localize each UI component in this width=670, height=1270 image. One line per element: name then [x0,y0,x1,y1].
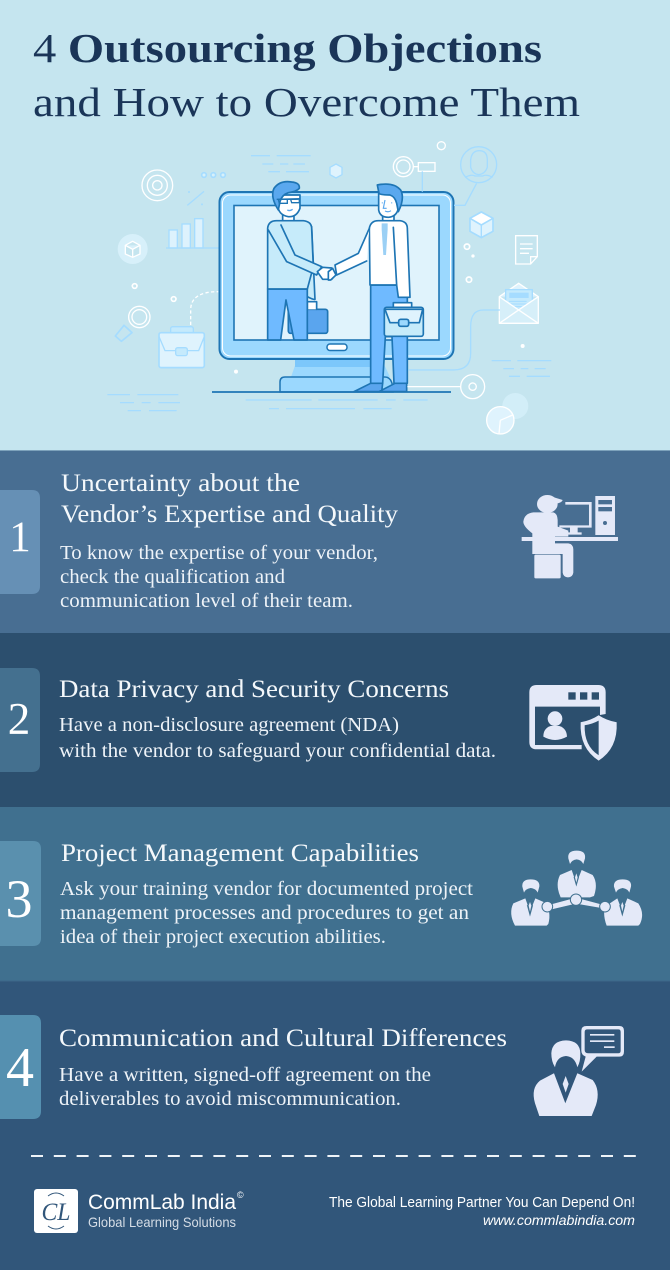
dashed divider [31,1155,636,1157]
body text 3: Ask your training vendor for documented project [60,879,474,900]
number tab 3: 3 [6,869,32,929]
tagline and website [329,1195,635,1228]
heading 4: Communication and Cultural Differences [59,1025,507,1052]
number tab 1: 1 [9,514,31,561]
number tab 3 [0,841,41,946]
panel: objection 3 [0,807,670,981]
body text 3: management processes and procedures to get an [60,903,469,924]
logo [34,1189,244,1233]
heading 3: Project Management Capabilities [61,840,419,867]
left floating icons [107,156,340,411]
heading 1 [61,470,399,528]
title: 4 Outsourcing Objections [33,25,542,71]
icon: window with user and shield [529,685,617,761]
panel: objection 4 [0,980,670,1270]
body text 4 [59,1065,431,1110]
panel: objection 1 [0,450,670,633]
body text 4: Have a written, signed-off agreement on the [59,1065,431,1086]
heading 1: Uncertainty about the [61,470,300,497]
number tab 2 [0,668,40,772]
monitor [212,192,454,392]
heading 1: Vendor’s Expertise and Quality [61,501,399,528]
number tab 2: 2 [8,694,30,744]
man with tie and briefcase [328,184,423,392]
right floating icons [330,142,551,434]
logo: CL [42,1199,70,1226]
icon: person at computer [522,495,618,578]
man with glasses [268,182,335,340]
number tab 4 [0,1015,41,1119]
body text 1: communication level of their team. [60,591,353,612]
body text 2 [59,715,496,762]
heading 2: Data Privacy and Security Concerns [59,676,449,703]
body text 2: with the vendor to safeguard your confidential data. [59,741,496,762]
body text 3 [60,879,474,948]
number tab 1 [0,490,40,594]
tagline and website: The Global Learning Partner You Can Depend On! [329,1195,635,1211]
header background panel [0,0,670,450]
body text 4: deliverables to avoid miscommunication. [59,1089,401,1110]
body text 1 [60,543,378,612]
number tab 4: 4 [6,1037,34,1099]
body text 2: Have a non-disclosure agreement (NDA) [59,715,399,736]
body text 1: check the qualification and [60,567,285,588]
body text 1: To know the expertise of your vendor, [60,543,378,564]
logo: Global Learning Solutions [88,1214,236,1230]
panel: objection 2 [0,633,670,807]
icon: person with speech bubble [534,1026,624,1116]
tagline and website: www.commlabindia.com [483,1212,635,1228]
title [33,25,580,125]
title: and How to Overcome Them [33,79,580,125]
hero illustration: handshake through monitor [107,142,551,434]
body text 3: idea of their project execution abilities. [60,927,386,948]
icon: connected team [511,851,642,926]
logo: © [237,1190,244,1200]
logo: CommLab India [88,1191,236,1214]
